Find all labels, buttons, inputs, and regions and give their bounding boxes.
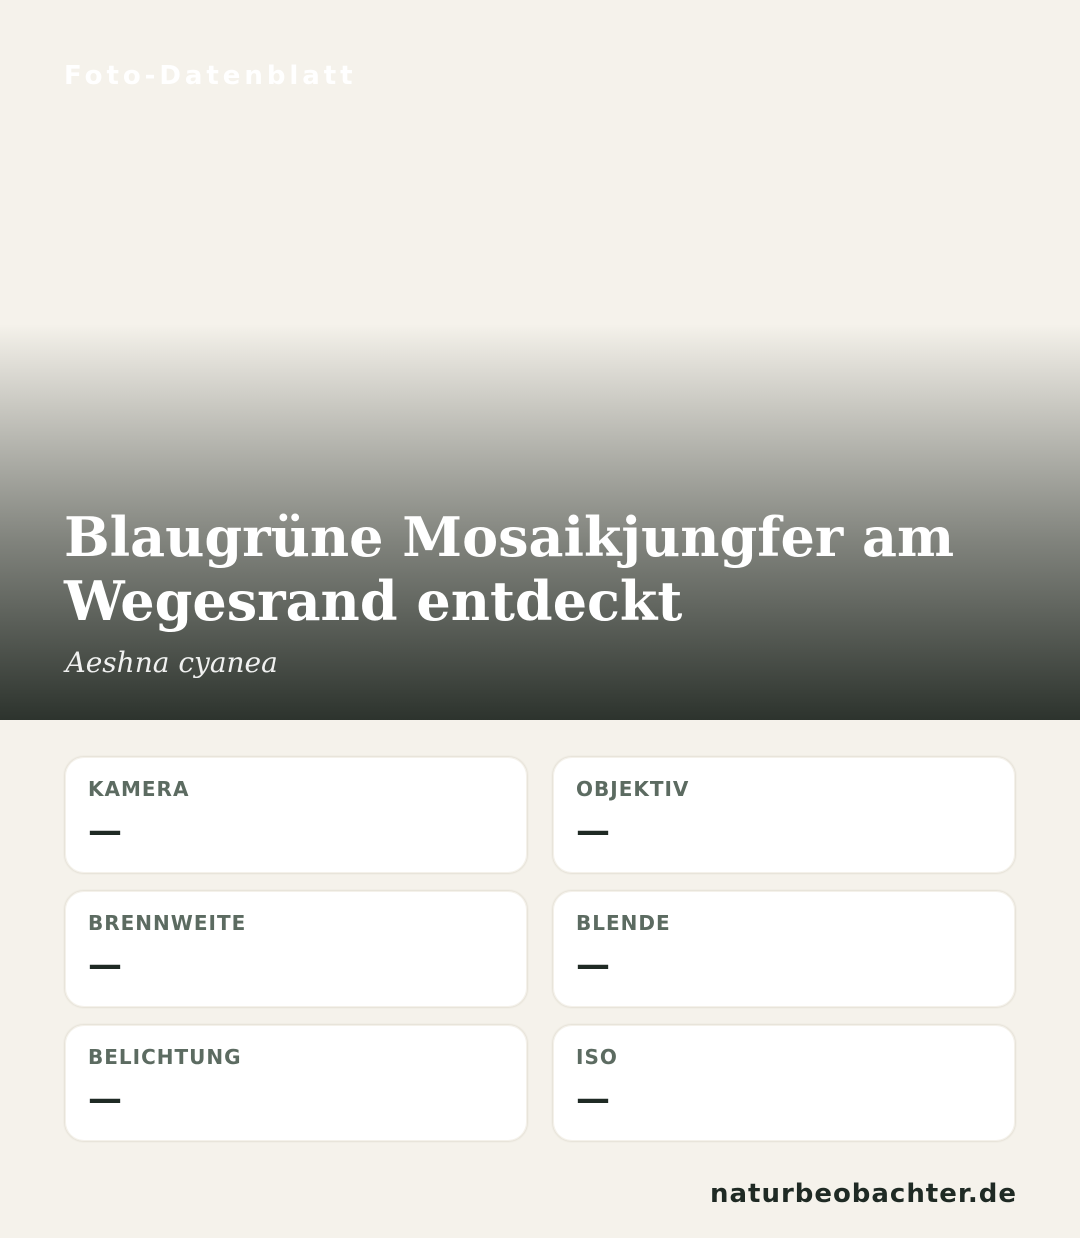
card: ISO (552, 1024, 1016, 1142)
card: Blende (552, 890, 1016, 1008)
kicker: Foto-Datenblatt: Foto-Datenblatt (64, 61, 357, 91)
species subtitle: Aeshna cyanea (66, 646, 278, 679)
value: Belichtung: — (88, 1079, 122, 1119)
value: Blende: — (576, 945, 610, 985)
title: Blaugrüne Mosaikjungfer am Wegesrand entdeckt (64, 505, 954, 633)
label: Kamera: KAMERA (88, 777, 189, 801)
card: Kamera (64, 756, 528, 874)
card: Belichtung (64, 1024, 528, 1142)
value: ISO: — (576, 1079, 610, 1119)
brand footer: naturbeobachter.de (710, 1179, 1017, 1209)
hero panel (0, 0, 1080, 720)
label: Objektiv: OBJEKTIV (576, 777, 689, 801)
card: Objektiv (552, 756, 1016, 874)
card: Brennweite (64, 890, 528, 1008)
value: Objektiv: — (576, 811, 610, 851)
value: Kamera: — (88, 811, 122, 851)
label: Brennweite: BRENNWEITE (88, 911, 246, 935)
label: ISO: ISO (576, 1045, 618, 1069)
label: Belichtung: BELICHTUNG (88, 1045, 242, 1069)
label: Blende: BLENDE (576, 911, 671, 935)
value: Brennweite: — (88, 945, 122, 985)
